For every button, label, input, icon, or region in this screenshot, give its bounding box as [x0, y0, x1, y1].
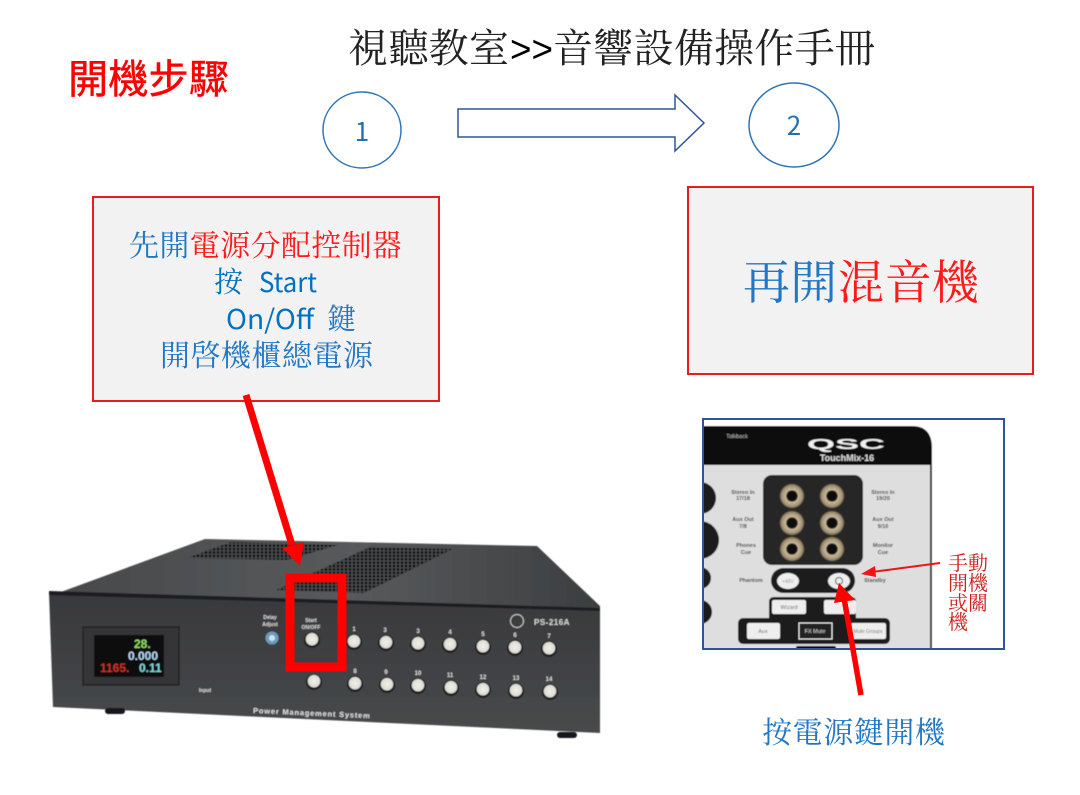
jack labels: Stereo In [731, 490, 755, 496]
mixer brand: TouchMix-16 [820, 453, 874, 463]
callout: manual on or off: 手動 [948, 552, 988, 575]
lower control buttons: Wizard [780, 605, 798, 611]
start button label: ON/OFF [302, 625, 320, 631]
caption: press power key to start: 按電源鍵開機 [762, 717, 946, 750]
model logo [510, 614, 570, 628]
button numbers: 7 [547, 634, 551, 640]
jack labels: Stereo In [871, 490, 895, 496]
panel: step 2 instructions [688, 187, 1033, 374]
jack labels: Monitor [873, 543, 894, 549]
button numbers: 9 [384, 670, 388, 676]
button numbers [199, 627, 553, 694]
button numbers: 13 [513, 676, 520, 682]
jack labels: Aux Out [872, 517, 894, 523]
jack labels: Cue [741, 550, 751, 556]
mixer photo frame [703, 419, 1004, 649]
phantom and standby buttons [771, 568, 855, 593]
button numbers: 4 [448, 630, 452, 636]
lower control buttons [738, 597, 890, 652]
button numbers: 12 [480, 675, 487, 681]
mixer brand [726, 434, 885, 463]
title: 音響設備操作手冊 [553, 26, 875, 71]
meter display: 1165. [100, 661, 129, 675]
text: open power distribution controller: 先開電源分配控制器 [129, 230, 402, 263]
model logo: PS-216A [534, 618, 570, 627]
button numbers: Input [199, 688, 211, 694]
delay adjust knob: Adjust [262, 622, 278, 628]
button numbers: 3 [416, 629, 420, 635]
device top surface [50, 539, 600, 612]
text: on off key: On/Off [226, 298, 316, 337]
device vents [187, 542, 453, 593]
jack labels: Phantom [739, 578, 763, 584]
jack labels: Standby [864, 578, 887, 584]
left side connectors [704, 482, 720, 624]
jack labels: Aux Out [732, 517, 754, 523]
panel: step 1 instructions [93, 197, 439, 401]
callout: manual on or off: 開機 [948, 572, 989, 595]
button numbers: 1 [352, 627, 356, 633]
arrow: manual power callout [861, 563, 940, 577]
device front panel [49, 592, 600, 733]
step 2 circle [749, 83, 839, 167]
button numbers: 8 [353, 669, 357, 675]
meter display [83, 627, 179, 685]
device feet [105, 708, 577, 738]
text: press start: Start [259, 261, 317, 300]
jack labels: 19/20 [876, 496, 890, 502]
step 1 circle: 1 [355, 112, 369, 149]
jack labels: Phones [736, 543, 756, 549]
button numbers: 10 [415, 671, 422, 677]
jack labels [731, 490, 895, 584]
button numbers: 11 [447, 673, 454, 679]
button numbers: 14 [546, 677, 553, 683]
lower control buttons: FX Mute [805, 629, 825, 635]
step 1 circle [323, 92, 401, 168]
arrow: step 1 to step 2 [458, 95, 704, 151]
jack labels: Cue [878, 550, 888, 556]
start button label: Start [305, 618, 317, 624]
photo: QSC TouchMix-16 mixer [704, 425, 933, 648]
lower control buttons: Mute Groups [854, 629, 883, 635]
arrow: box to start button [246, 395, 304, 566]
mixer body [700, 426, 932, 655]
delay adjust knob [262, 615, 278, 644]
delay adjust knob: Delay [263, 615, 277, 621]
text: on off key: 鍵 [327, 303, 356, 336]
panel: step 2 instructions: 再開混音機 [743, 258, 980, 310]
button numbers: 3 [383, 628, 387, 634]
bottom row buttons [306, 674, 558, 700]
meter display: 0.000 [128, 649, 158, 663]
phantom and standby buttons: +48V [782, 579, 795, 585]
jack labels: 9/10 [878, 524, 888, 530]
jack panel [763, 475, 863, 565]
jack labels: 17/18 [736, 496, 750, 502]
meter display: 0.11 [139, 661, 162, 675]
title: 視聽教室 [348, 26, 509, 71]
meter display: 28. [134, 637, 151, 651]
button numbers: 6 [513, 633, 517, 639]
lower control buttons: Aux [758, 629, 768, 635]
highlight box: start button [290, 578, 342, 667]
text: press start: 按 [214, 266, 243, 299]
callout: manual on or off [948, 552, 989, 634]
title: >> [510, 29, 553, 71]
heading: startup steps: 開機步驟 [68, 47, 229, 105]
mixer brand: Talkback [726, 434, 748, 440]
arrow: press power key [834, 583, 861, 695]
photo: power management system [49, 539, 600, 738]
top row buttons [304, 632, 557, 657]
callout: manual on or off: 或關 [948, 592, 988, 615]
callout: manual on or off: 機 [948, 611, 969, 634]
jack labels: 7/8 [739, 524, 747, 530]
product name: Power Management System [253, 706, 371, 720]
mixer brand: QSC [807, 436, 885, 453]
step 2 circle: 2 [787, 106, 801, 143]
text: turn on cabinet main power: 開啓機櫃總電源 [160, 340, 374, 373]
start button label [302, 618, 320, 631]
button numbers: 5 [481, 632, 485, 638]
